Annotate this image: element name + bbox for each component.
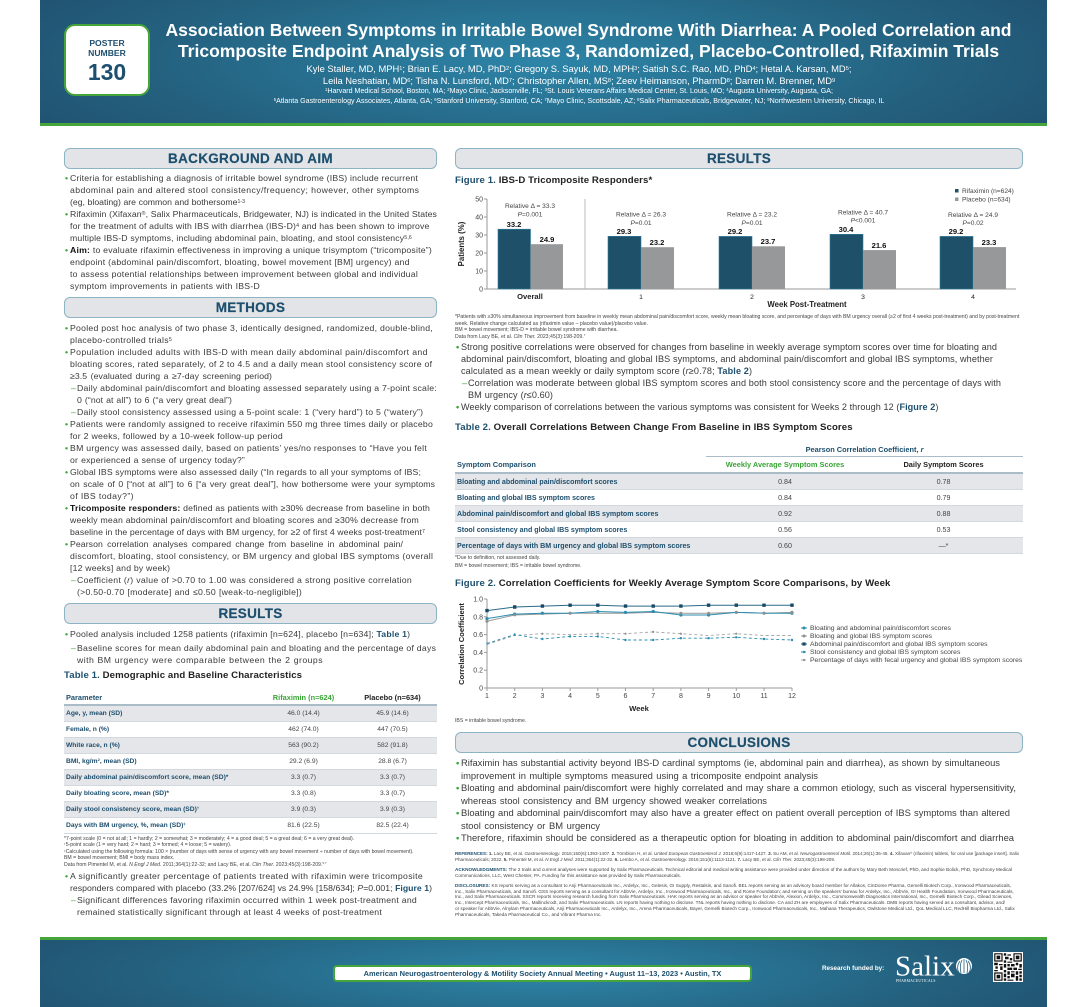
table 1 footnotes — [64, 836, 414, 868]
line chart: correlation coefficients by week: 0.2 — [473, 668, 483, 675]
heading: results left: RESULTS — [218, 606, 283, 621]
table 1: 563 (90.2) — [288, 742, 319, 749]
text block: methods bullets: BM urgency was assessed daily, based on patients’ yes/no responses to “Have you felt — [70, 443, 427, 453]
figure 2 footnote: IBS = irritable bowel syndrome. — [455, 718, 526, 724]
text: • — [65, 467, 68, 477]
relative change labels: P=0.001 — [518, 212, 543, 218]
text block: methods bullets: bloating scores, rated separately, of 2 to 4.5 and a daily mean stool consistency score of — [70, 359, 432, 369]
table 1: 3.9 (0.3) — [291, 806, 316, 813]
table 2: Percentage of days with BM urgency and global IBS symptom scores — [457, 542, 690, 550]
line chart: correlation coefficients by week: 5 — [596, 693, 600, 700]
title: Tricomposite Endpoint Analysis of Two Phase 3, Randomized, Placebo-Controlled, Rifaximin Trials — [178, 41, 999, 61]
relative change labels: P=0.01 — [741, 220, 763, 227]
text block: methods bullets: on scale of 0 [“not at all”] to 6 [“a very great deal”], how bothersome were your symptoms — [70, 479, 435, 489]
text block: results bullets: Pooled analysis included 1258 patients (rifaximin [n=624], placebo [n=634]; Table 1) — [70, 629, 410, 639]
figure 1 footnotes — [455, 314, 1020, 340]
text block: correlation bullets: – — [462, 378, 467, 388]
logo: Salix: Salix — [895, 950, 955, 982]
heading: methods: METHODS — [216, 300, 285, 315]
figure 1 footnotes: BM = bowel movement; IBS-D = irritable bowel syndrome with diarrhea. — [455, 327, 618, 333]
legend: Stool consistency and global IBS symptom scores — [810, 649, 961, 656]
bars: rifaximin — [498, 229, 973, 289]
text block: conclusions bullets: whereas stool consistency and BM urgency showed weaker correlations — [461, 794, 767, 806]
text block: results bullets: Baseline scores for mean daily abdominal pain and bloating and the percentage of days — [77, 642, 436, 652]
line chart: correlation coefficients by week: Correlation Coefficient — [457, 603, 466, 685]
line chart: correlation coefficients by week: 6 — [624, 693, 628, 700]
table 1: 447 (70.5) — [377, 726, 408, 733]
text block: methods bullets: Tricomposite responders: defined as patients with ≥30% decrease from baseline in both — [70, 503, 430, 513]
table 1: Age, y, mean (SD) — [66, 710, 122, 717]
line chart: correlation coefficients by week: 0.8 — [473, 614, 483, 621]
text block: background bullets: Rifaximin (Xifaxan®, Salix Pharmaceuticals, Bridgewater, NJ) is indicated in the United States — [70, 209, 437, 219]
poster number box: POSTER — [89, 38, 125, 48]
disclosures: Inc., and Salix Pharmaceuticals. SSCR reports receiving research funding from Salix Pharmaceuticals. HAK reports serving as an advisor or speaker for AbbVie, Alexion, Ardelyx, Inc., Commonwealth Diagnostics International, Inc., Gemelli Biotech Corp., Gilead Sciences, — [455, 894, 1012, 899]
authors — [307, 63, 851, 86]
table 2: Bloating and abdominal pain/discomfort scores — [457, 478, 617, 486]
table 2: Weekly Average Symptom Scores — [726, 460, 844, 469]
table 1: 29.2 (6.9) — [289, 758, 318, 765]
heading: results right — [455, 148, 1023, 169]
text: • — [65, 419, 68, 429]
line chart: correlation coefficients by week: 3 — [540, 693, 544, 700]
table 2 caption: Table 2. Overall Correlations Between Change From Baseline in IBS Symptom Scores — [455, 422, 853, 433]
text block: background bullets: (eg, bloating) are common and bothersome1-3 — [70, 197, 245, 207]
text block: methods bullets: – — [71, 407, 76, 417]
relative change labels: P<0.001 — [851, 218, 876, 224]
table 2 footnotes: BM = bowel movement; IBS = irritable bowel syndrome. — [455, 562, 582, 568]
line chart: correlation coefficients by week: 2 — [513, 693, 517, 700]
title — [165, 20, 1012, 61]
table 1: 3.3 (0.7) — [380, 790, 405, 797]
footer banner — [40, 937, 1047, 1007]
series: stool consistency — [487, 633, 792, 645]
bar chart: tricomposite responders: Patients (%) — [457, 221, 466, 266]
axis categories: 1 — [639, 294, 643, 301]
text block: methods bullets: Pearson correlation analyses compared change from baseline in abdominal pain/ — [70, 539, 403, 549]
text block: conclusions bullets — [456, 757, 1016, 843]
poster number box — [64, 24, 150, 96]
text block: methods bullets: Coefficient (r) value of >0.70 to 1.00 was considered a strong positive correlation — [77, 575, 412, 585]
header banner — [40, 0, 1047, 126]
relative change labels: Relative Δ = 40.7 — [838, 210, 888, 216]
text block: background bullets: Criteria for establishing a diagnosis of irritable bowel syndrome (IBS) include recurrent — [70, 173, 418, 183]
table 1: 82.5 (22.4) — [376, 822, 409, 829]
text: • — [456, 807, 459, 818]
legend — [955, 188, 1014, 204]
text: • — [456, 757, 459, 768]
text block: results bullets: with BM urgency were comparable between the 2 groups — [77, 654, 323, 664]
line chart: correlation coefficients by week: 4 — [568, 693, 572, 700]
line chart: correlation coefficients by week: 1.0 — [473, 596, 483, 604]
table 2: —* — [939, 542, 948, 550]
table 1: Rifaximin (n=624) — [273, 692, 334, 702]
table 2: Daily Symptom Scores — [903, 460, 984, 469]
table 1: Parameter — [66, 692, 102, 702]
poster number box: 130 — [88, 59, 126, 85]
bar chart: tricomposite responders: 20 — [475, 250, 483, 258]
bar chart: tricomposite responders: 10 — [475, 268, 483, 276]
legend: Placebo (n=634) — [962, 196, 1011, 204]
bar values: 24.9 — [540, 235, 554, 244]
affiliations: 1Harvard Medical School, Boston, MA; 2Mayo Clinic, Jacksonville, FL; 3St. Louis Veterans Affairs Medical Center, St. Louis, MO; 4Augusta University, Augusta, GA; — [325, 87, 833, 95]
heading: results right: RESULTS — [707, 151, 771, 166]
table 1 footnotes: Data from Pimentel M, et al. N Engl J Med. 2011;364(1):22-32; and Lacy BE, et al. Clin Ther. 2023;45(3):198-209.5,7 — [64, 861, 327, 868]
text block: background bullets: Aim: to evaluate rifaximin effectiveness in improving a unique trisymptom (“tricomposite”) — [70, 245, 432, 255]
table 1: 3.3 (0.7) — [380, 774, 405, 781]
table 1: 45.9 (14.6) — [376, 710, 409, 717]
line chart: correlation coefficients by week: 8 — [679, 693, 683, 700]
bar values: 29.2 — [949, 227, 963, 236]
text block: background bullets: to assess potential relationships between improvement between global and individual — [70, 269, 418, 279]
table 1: Daily stool consistency score, mean (SD)† — [66, 805, 199, 813]
relative change labels: Relative Δ = 24.9 — [948, 212, 998, 219]
text block: methods bullets: for 2 weeks, followed by a 10-week follow-up period — [70, 431, 283, 441]
line chart: correlation coefficients by week: 9 — [707, 693, 711, 700]
text block: correlation bullets: calculated as a mean weekly or daily symptom score (r≥0.78; Table 2) — [461, 366, 752, 376]
figure 1 footnotes: *Patients with ≥30% simultaneous improvement from baseline in weekly mean abdominal pain/discomfort score, weekly mean bloating score, and percentage of days with BM urgency overall (≥2 of first 4 weeks post-treatment) and by post-treatment — [455, 314, 1019, 320]
bar values: 23.2 — [650, 238, 664, 247]
text block: methods bullets — [65, 323, 437, 597]
table 1: 3.3 (0.7) — [291, 774, 316, 781]
references: REFERENCES: 1. Lacy BE, et al. Gastroenterology. 2016;150(6):1393-1407. 2. Törnblom H, et al. United European Gastroenterol J. 2018;6(9):1417-1427. 3. Su AM, et al. Neurogastroenterol Motil. 2014;26(1):36-45. 4. Xifaxan® (rifaximin) tablets, for oral use [package insert]. Salix — [455, 851, 1019, 856]
text block: responders bullets — [65, 871, 432, 917]
figure 1 footnotes: Data from Lacy BE, et al. Clin Ther. 2023;45(3):198-209.7 — [455, 333, 585, 340]
table 2 footnotes — [455, 555, 582, 568]
line chart: correlation coefficients by week: Week — [629, 704, 650, 713]
line chart: correlation coefficients by week: 1 — [485, 693, 489, 700]
table 2: Pearson Correlation Coefficient, r — [806, 445, 923, 454]
table 1: Daily bloating score, mean (SD)* — [66, 790, 169, 797]
table 1: 462 (74.0) — [288, 726, 319, 733]
text block: conclusions bullets: Therefore, rifaximin should be considered as a therapeutic option for bloating in addition to abdominal pain/discomfort and diarrhea — [461, 832, 1014, 843]
heading: methods — [64, 297, 437, 318]
text block: methods bullets: baseline in the percentage of days with BM urgency, for ≥2 of first 4 weeks post-treatment7 — [70, 527, 425, 537]
text block: background bullets: endpoint (abdominal pain/discomfort, bloating, bowel movement [BM] urgency) and — [70, 257, 410, 267]
table 2: Bloating and global IBS symptom scores — [457, 494, 595, 502]
text block: conclusions bullets: stool consistency or BM urgency — [461, 820, 600, 830]
title: Association Between Symptoms in Irritable Bowel Syndrome With Diarrhea: A Pooled Correlation and — [165, 20, 1012, 40]
table 2: 0.78 — [937, 478, 950, 486]
axis categories: 2 — [750, 294, 754, 301]
legend: Abdominal pain/discomfort and global IBS symptom scores — [810, 641, 988, 648]
table 1: 81.6 (22.5) — [287, 822, 320, 829]
text block: methods bullets: ≥3.5 (evaluated during a ≥7-day screening period) — [70, 371, 272, 381]
text block: correlation bullets: BM urgency (r≤0.60) — [468, 390, 553, 400]
table 2: 0.92 — [778, 510, 792, 518]
legend: Percentage of days with fecal urgency and global IBS symptom scores — [810, 657, 1023, 664]
references — [455, 851, 1019, 862]
text block: methods bullets: – — [71, 383, 76, 393]
heading: conclusions — [455, 732, 1023, 753]
text block: methods bullets: discomfort, bloating, stool consistency, or BM urgency and global IBS symptoms (overall — [70, 551, 433, 561]
table 2 — [455, 445, 1023, 554]
table 2: 0.56 — [778, 526, 792, 534]
table 2: Symptom Comparison — [457, 460, 536, 468]
text block: responders bullets: Significant differences favoring rifaximin occurred within 1 week post-treatment and — [77, 895, 417, 905]
disclosures — [455, 883, 1015, 917]
figure 1 footnotes: week. Relative change calculated as (rifaximin value – placebo value)/placebo value. — [455, 320, 648, 326]
QR code — [993, 952, 1023, 982]
table 1: BMI, kg/m2, mean (SD) — [66, 757, 137, 765]
heading: background and aim: BACKGROUND AND AIM — [168, 151, 333, 166]
axis categories: Week Post-Treatment — [767, 300, 847, 309]
table 1 caption: Table 1. Demographic and Baseline Characteristics — [64, 670, 302, 681]
bar values: 29.3 — [617, 227, 631, 236]
series: abdominal and global — [485, 604, 794, 612]
meeting pill — [333, 965, 752, 982]
legend: Bloating and global IBS symptom scores — [810, 633, 933, 640]
text block: conclusions bullets: Rifaximin has substantial activity beyond IBS-D cardinal symptoms (ie, abdominal pain and diarrhea), as shown by simultaneous — [461, 757, 1000, 768]
line chart: correlation coefficients by week: 12 — [788, 693, 796, 700]
table 2: Abdominal pain/discomfort and global IBS symptom scores — [457, 510, 658, 518]
text block: correlation bullets: abdominal pain/discomfort, bloating and global IBS symptoms, and abdominal pain/discomfort and global IBS symptoms, whether — [461, 354, 993, 364]
table 2: 0.88 — [937, 510, 950, 518]
relative change labels: Relative Δ = 26.3 — [616, 212, 666, 218]
heading: results left — [64, 603, 437, 624]
acknowledgments — [455, 867, 1012, 878]
line chart: correlation coefficients by week: 0.6 — [473, 632, 483, 639]
text: • — [65, 503, 68, 513]
table 2 footnotes: *Due to definition, not assessed daily. — [455, 555, 540, 561]
table 1: 582 (91.8) — [377, 742, 408, 749]
disclosures: Pharmaceuticals, Takeda Pharmaceutical Co., and Vibrant Pharma Inc. — [455, 912, 602, 917]
table 1: Placebo (n=634) — [364, 692, 421, 702]
text block: responders bullets: – — [71, 895, 76, 905]
text block: responders bullets: responders compared with placebo (33.2% [207/624] vs 24.9% [158/634]; P=0.001; Figure 1) — [70, 883, 432, 893]
figure 2 caption: Figure 2. Correlation Coefficients for Weekly Average Symptom Score Comparisons, by Week — [455, 578, 890, 589]
text block: responders bullets: remained statistically significant through at least 4 weeks of post-treatment — [77, 907, 382, 917]
relative change labels: Relative Δ = 33.3 — [505, 203, 555, 210]
text block: methods bullets: Population included adults with IBS-D with mean daily abdominal pain/discomfort and — [70, 347, 428, 357]
disclosures: or speaker for AbbVie, Alnylam Pharmaceuticals, Anji Pharmaceuticals Inc., Ardelyx, Inc., Arena Pharmaceuticals, Bayer, Gemelli Biotech Corp., Ironwood Pharmaceuticals, Inc., Mahana Therapeutics, Owlstone Medical Ltd., QoL Medical LLC, RedHill Biopharma Ltd., Salix — [455, 906, 1015, 911]
text block: responders bullets: A significantly greater percentage of patients treated with rifaximin were tricomposite — [70, 871, 423, 881]
bar chart: tricomposite responders: 50 — [475, 196, 483, 204]
axis categories: 3 — [861, 294, 865, 301]
text: • — [65, 323, 68, 333]
research funded by: Research funded by: — [822, 965, 884, 972]
bar values — [507, 220, 996, 250]
line chart: correlation coefficients by week: 11 — [760, 693, 768, 700]
text block: methods bullets: or experienced a sense of urgency today?” — [70, 455, 245, 465]
text block: background bullets: symptom improvements in patients with IBS-D — [70, 281, 260, 291]
table 1 footnotes: BM = bowel movement; BMI = body mass index. — [64, 855, 174, 861]
relative change labels: P=0.01 — [630, 220, 652, 227]
table 2: 0.60 — [778, 542, 792, 550]
legend: Bloating and abdominal pain/discomfort scores — [810, 625, 952, 632]
disclosures: DISCLOSURES: KS reports serving as a consultant to Anji Pharmaceuticals Inc., Ardelyx, Inc., Gelesis, GI Supply, Restalsis, and Sanofi. BEL reports serving as an advisory board member for Allakos, CinDome Pharma, Gemelli Biotech Corp., Ironwood Pharmaceuticals, — [455, 883, 1011, 888]
line chart: correlation coefficients by week: 7 — [651, 693, 655, 700]
affiliations — [274, 87, 884, 104]
table 2: 0.53 — [937, 526, 950, 534]
line chart: correlation coefficients by week: 0 — [479, 686, 483, 692]
heading: conclusions: CONCLUSIONS — [687, 735, 791, 750]
text block: methods bullets: (>0.50-0.70 [moderate] and ≤0.50 [weak-to-negligible]) — [77, 587, 302, 597]
line chart: correlation coefficients by week: 0.4 — [473, 650, 483, 657]
text block: results bullets: – — [71, 642, 76, 652]
text block: correlation bullets: Weekly comparison of correlations between the various symptoms was consistent for Weeks 2 through 12 (Figure 2) — [461, 402, 938, 412]
figure 1 caption: Figure 1. IBS-D Tricomposite Responders* — [455, 175, 652, 186]
table 1: White race, n (%) — [66, 742, 120, 749]
text: • — [456, 402, 459, 412]
table 2: 0.84 — [778, 478, 792, 486]
bar values: 29.2 — [728, 227, 742, 236]
meeting pill: American Neurogastroenterology & Motility Society Annual Meeting • August 11–13, 2023 • Austin, TX — [364, 969, 721, 978]
markers: other series — [485, 610, 794, 641]
heading: background and aim — [64, 148, 437, 169]
references: Pharmaceuticals; 2022. 5. Pimentel M, et al. N Engl J Med. 2011;364(1):22-32. 6. Lembo A, et al. Gastroenterology. 2016;151(6):1113-1121. 7. Lacy BE, et al. Clin Ther. 2023;45(3):198-209. — [455, 857, 835, 862]
acknowledgments: ACKNOWLEDGMENTS: The 2 trials and current analyses were supported by Salix Pharmaceuticals. Technical editorial and medical writing assistance were provided under direction of the authors by Mary Beth Moncrief, PhD, and Sophie Bolick, PhD, Synchrony Medical — [455, 867, 1012, 872]
table 1 footnotes: ‡Calculated using the following formula: 100 × (number of days with sense of urgency with any bowel movement ÷ number of days with bowel movement). — [64, 849, 414, 855]
axis categories: Overall — [517, 292, 543, 301]
text: • — [65, 629, 68, 639]
series: percentage of days with urgency — [487, 632, 792, 644]
text: • — [65, 209, 68, 219]
relative change labels — [505, 203, 998, 227]
text: • — [65, 871, 68, 881]
text block: methods bullets: weekly mean abdominal pain/discomfort and bloating scores and ≥30% decrease from — [70, 515, 419, 525]
logo: Salix: PHARMACEUTICALS — [896, 979, 936, 983]
text block: background bullets: multiple IBS-D symptoms, including abdominal pain, bloating, and stool consistency5,6 — [70, 233, 412, 243]
bar values: 23.3 — [982, 238, 996, 247]
bar chart: tricomposite responders: 30 — [475, 232, 483, 240]
bar values: 23.7 — [761, 237, 775, 246]
text: • — [65, 347, 68, 357]
text block: correlation bullets: Strong positive correlations were observed for changes from baseline in weekly average symptom scores over time for bloating and — [461, 342, 997, 352]
table 1: 3.9 (0.3) — [380, 806, 405, 813]
text block: correlation bullets: Correlation was moderate between global IBS symptom scores and both stool consistency score and the percentage of days with — [468, 378, 1001, 388]
table 1 footnotes: †5-point scale (1 = very hard; 2 = hard; 3 = formed; 4 = loose; 5 = watery). — [64, 842, 231, 848]
table 1: Female, n (%) — [66, 726, 109, 733]
text block: methods bullets: – — [71, 575, 76, 585]
text block: conclusions bullets: Bloating and abdominal pain/discomfort may also have a greater effect on patient overall perception of IBS symptoms than altered — [461, 807, 1010, 818]
text block: methods bullets: Pooled post hoc analysis of two phase 3, identically designed, randomized, double-blind, — [70, 323, 433, 333]
acknowledgments: Communications, LLC, West Chester, PA. Funding for this assistance was provided by Salix Pharmaceuticals. — [455, 873, 681, 878]
line chart: correlation coefficients by week — [457, 596, 1023, 713]
relative change labels: P=0.02 — [962, 220, 984, 227]
text block: correlation bullets — [456, 342, 1001, 412]
text: • — [65, 245, 68, 255]
series: bloating and global — [487, 612, 792, 621]
text block: background bullets: abdominal pain and altered stool consistency/frequency; however, other symptoms — [70, 185, 419, 195]
text: • — [456, 832, 459, 843]
bars: placebo — [530, 244, 1006, 289]
bar chart: tricomposite responders — [457, 188, 1016, 309]
relative change labels: Relative Δ = 23.2 — [727, 212, 777, 218]
axis categories — [517, 292, 975, 309]
text block: methods bullets: Daily stool consistency assessed using a 5-point scale: 1 (“very hard”) to 5 (“watery”) — [77, 407, 423, 417]
bar chart: tricomposite responders: 40 — [475, 214, 483, 222]
text: • — [65, 173, 68, 183]
series: bloating and abdominal — [487, 612, 792, 619]
table 1: Daily abdominal pain/discomfort score, mean (SD)* — [66, 774, 228, 781]
table 1: 28.8 (6.7) — [378, 758, 407, 765]
bar values: 30.4 — [839, 225, 854, 234]
text: • — [456, 342, 459, 352]
text block: methods bullets: 0 (“not at all”) to 6 (“a very great deal”) — [77, 395, 232, 405]
text block: methods bullets: [12 weeks] and by week) — [70, 563, 170, 573]
text block: results bullets — [65, 629, 436, 664]
table 1 footnotes: *7-point scale (0 = not at all; 1 = hardly; 2 = somewhat; 3 = moderately; 4 = a good deal; 5 = a great deal; 6 = a very great deal). — [64, 836, 354, 842]
disclosures: Inc., Salix Pharmaceuticals, and Sanofi. GSS reports serving as a consultant for AbbVie, Ardelyx, Inc., Ironwood Pharmaceuticals, Inc., and Rome Foundation; and serving on the speakers’ bureau for Ardelyx, Inc., AbbVie, GI Health Foundation, Ironwood Pharmaceuticals, — [455, 889, 1014, 894]
line chart: correlation coefficients by week: 10 — [732, 693, 740, 700]
axis categories: 4 — [971, 294, 975, 301]
authors: Leila Neshatian, MD6; Tisha N. Lunsford, MD7; Christopher Allen, MS8; Zeev Heimanson, PharmD8; Darren M. Brenner, MD9 — [323, 75, 835, 86]
text block: methods bullets: of IBS today?”) — [70, 491, 134, 501]
table 1: 3.3 (0.8) — [291, 790, 316, 797]
table 1: Days with BM urgency, %, mean (SD)‡ — [66, 821, 186, 829]
bar values: 33.2 — [507, 220, 521, 229]
table 1: 46.0 (14.4) — [287, 710, 320, 717]
text block: methods bullets: placebo-controlled trials5 — [70, 335, 172, 345]
text block: methods bullets: Patients were randomly assigned to receive rifaximin 550 mg three times daily or placebo — [70, 419, 433, 429]
table 2: 0.84 — [778, 494, 792, 502]
text: • — [65, 443, 68, 453]
disclosures: Inc., Intercept Pharmaceuticals, Inc., Mallinckrodt, and Salix Pharmaceuticals. LN reports having nothing to disclose. TNL reports having nothing to disclose. CA and ZH are employees of Salix Pharmaceuticals. DMB reports having served as a consultant, advisor, and/ — [455, 900, 1005, 905]
authors: Kyle Staller, MD, MPH1; Brian E. Lacy, MD, PhD2; Gregory S. Sayuk, MD, MPH3; Satish S.C. Rao, MD, PhD4; Hetal A. Karsan, MD5; — [307, 63, 851, 74]
text block: methods bullets: Daily abdominal pain/discomfort and bloating assessed separately using a 7-point scale: — [77, 383, 437, 393]
text block: methods bullets: Global IBS symptoms were also assessed daily (“In regards to all your symptoms of IBS; — [70, 467, 421, 477]
bar chart: tricomposite responders: 0 — [479, 286, 483, 294]
affiliations: 5Atlanta Gastroenterology Associates, Atlanta, GA; 6Stanford University, Stanford, CA; 7Mayo Clinic, Scottsdale, AZ; 8Salix Pharmaceuticals, Bridgewater, NJ; 9Northwestern University, Chicago, IL — [274, 96, 884, 104]
text: • — [65, 539, 68, 549]
table 1 — [64, 692, 437, 834]
text: • — [456, 782, 459, 793]
poster number box: NUMBER — [88, 48, 126, 58]
text block: background bullets: for the treatment of adults with IBS with diarrhea (IBS-D)4 and has been shown to improve — [70, 221, 430, 231]
text block: background bullets — [65, 173, 437, 291]
table 2: Stool consistency and global IBS symptom scores — [457, 526, 627, 534]
legend: Rifaximin (n=624) — [962, 188, 1014, 195]
bar values: 21.6 — [872, 241, 886, 250]
text block: conclusions bullets: Bloating and abdominal pain/discomfort were highly correlated and may share a common etiology, such as visceral hypersensitivity, — [461, 782, 1016, 793]
table 2: 0.79 — [937, 494, 950, 502]
legend — [801, 625, 1023, 664]
text block: conclusions bullets: improvement in multiple symptoms measured using a tricomposite endpoint analysis — [461, 770, 818, 780]
